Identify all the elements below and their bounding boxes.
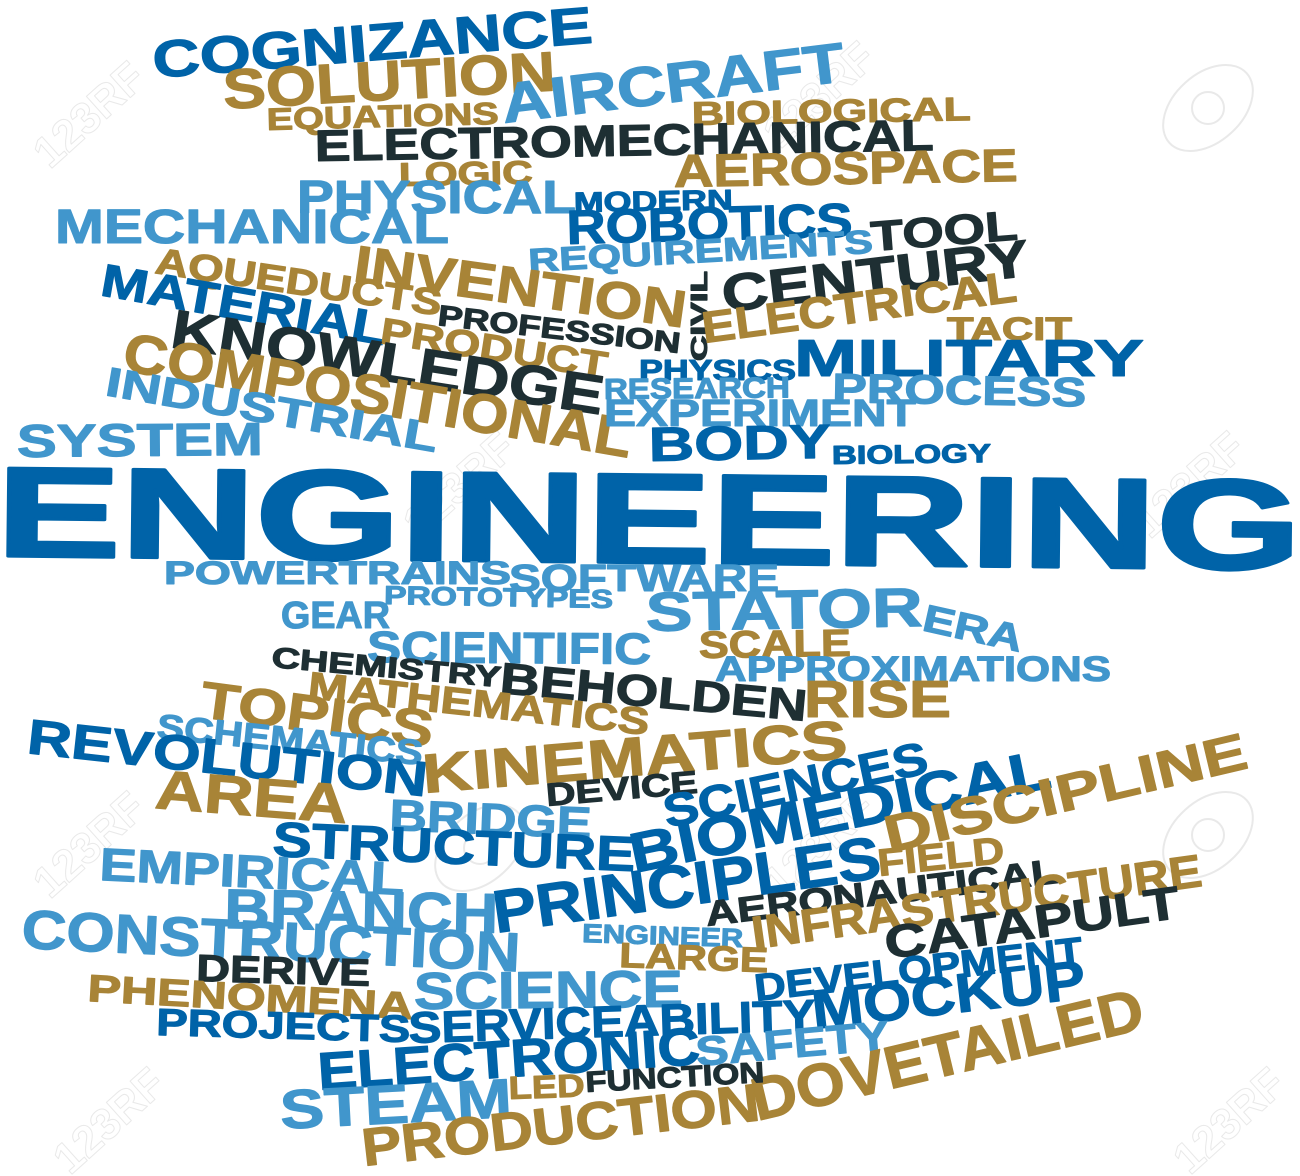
word: POWERTRAINS: POWERTRAINS (164, 555, 511, 591)
word: STATOR: STATOR (645, 576, 923, 643)
word: REQUIREMENTS: REQUIREMENTS (527, 223, 874, 279)
word: ELECTRONIC: ELECTRONIC (316, 1017, 702, 1102)
word: BIOMEDICAL: BIOMEDICAL (624, 737, 1056, 885)
word: TOPICS: TOPICS (197, 671, 437, 759)
word: PROFESSION: PROFESSION (436, 300, 682, 360)
word: SERVICEABILITY: SERVICEABILITY (408, 991, 816, 1053)
word: DERIVE: DERIVE (196, 948, 371, 995)
word: PRODUCTION: PRODUCTION (359, 1073, 763, 1176)
word: BRIDGE: BRIDGE (389, 791, 592, 848)
word: ELECTRICAL: ELECTRICAL (699, 262, 1020, 353)
word: SYSTEM: SYSTEM (17, 413, 263, 467)
word: SOLUTION: SOLUTION (221, 39, 557, 121)
watermarks: 123RF (24, 783, 155, 907)
word: CATAPULT: CATAPULT (881, 876, 1183, 969)
word: LARGE: LARGE (619, 936, 769, 980)
watermarks: 123RF (754, 783, 885, 907)
word: MOCKUP: MOCKUP (808, 948, 1089, 1041)
word: CIVIL: CIVIL (686, 271, 712, 361)
word: EXPERIMENT: EXPERIMENT (604, 393, 916, 435)
word: LOGIC: LOGIC (398, 154, 533, 193)
word: PHYSICAL: PHYSICAL (297, 171, 576, 223)
word: RESEARCH: RESEARCH (604, 372, 790, 406)
word: SCIENCE: SCIENCE (414, 961, 683, 1021)
word: INFRASTRUCTURE: INFRASTRUCTURE (748, 844, 1205, 959)
word: MATERIAL: MATERIAL (97, 254, 391, 355)
word: CHEMISTRY: CHEMISTRY (270, 642, 502, 694)
word: RISE: RISE (804, 671, 951, 729)
word: PROCESS: PROCESS (832, 365, 1087, 415)
word: FUNCTION: FUNCTION (585, 1057, 765, 1099)
word: MECHANICAL: MECHANICAL (55, 201, 449, 254)
word: EMPIRICAL: EMPIRICAL (99, 838, 406, 905)
word: AEROSPACE: AEROSPACE (673, 139, 1018, 197)
word: SCALE: SCALE (699, 623, 851, 667)
word: MODERN: MODERN (574, 184, 733, 218)
word: EQUATIONS: EQUATIONS (266, 96, 499, 137)
word: SCIENCES: SCIENCES (658, 731, 932, 838)
word: COMPOSITIONAL: COMPOSITIONAL (119, 321, 637, 469)
word: INDUSTRIAL: INDUSTRIAL (102, 359, 441, 461)
word: CONSTRUCTION: CONSTRUCTION (20, 898, 522, 983)
word: TOOL: TOOL (869, 202, 1019, 260)
word: PROTOTYPES: PROTOTYPES (384, 580, 613, 614)
word: AIRCRAFT: AIRCRAFT (498, 30, 848, 135)
word: SCIENTIFIC: SCIENTIFIC (367, 623, 651, 674)
word: BIOLOGY: BIOLOGY (832, 438, 991, 470)
word: PHENOMENA: PHENOMENA (86, 968, 414, 1028)
word: BRANCH: BRANCH (224, 877, 499, 945)
watermarks: 123RF (1124, 423, 1255, 547)
word: STRUCTURE: STRUCTURE (272, 813, 636, 882)
word: PHYSICS: PHYSICS (639, 355, 796, 387)
word: MATHEMATICS: MATHEMATICS (306, 665, 652, 744)
word: DOVETAILED: DOVETAILED (744, 976, 1150, 1134)
word: SCHEMATICS: SCHEMATICS (155, 707, 425, 773)
word: PRODUCT: PRODUCT (378, 310, 611, 386)
word: GEAR: GEAR (281, 595, 390, 637)
word: TACIT: TACIT (947, 311, 1073, 347)
watermarks: 123RF (754, 33, 885, 157)
word: AERONAUTICAL: AERONAUTICAL (703, 852, 1060, 934)
word: AREA: AREA (153, 758, 350, 835)
word: AQUEDUCTS: AQUEDUCTS (153, 240, 445, 324)
word: DISCIPLINE: DISCIPLINE (878, 723, 1253, 865)
word: ERA: ERA (919, 598, 1027, 661)
word: ROBOTICS: ROBOTICS (566, 195, 853, 255)
word: ENGINEER: ENGINEER (582, 918, 744, 953)
watermarks: 123RF (394, 423, 525, 547)
word: INVENTION: INVENTION (350, 235, 690, 340)
word: APPROXIMATIONS: APPROXIMATIONS (715, 650, 1111, 689)
watermarks: 123RF (24, 53, 155, 177)
word: BODY: BODY (648, 416, 831, 472)
word: LED: LED (508, 1067, 585, 1106)
word: SAFETY: SAFETY (694, 1012, 891, 1075)
word: PRINCIPLES: PRINCIPLES (488, 824, 885, 946)
word: ELECTROMECHANICAL: ELECTROMECHANICAL (314, 111, 934, 171)
word: SOFTWARE: SOFTWARE (509, 558, 779, 600)
word: REVOLUTION: REVOLUTION (25, 710, 430, 807)
word: COGNIZANCE: COGNIZANCE (150, 0, 595, 90)
word: BEHOLDEN: BEHOLDEN (498, 654, 809, 731)
word: STEAM: STEAM (278, 1067, 513, 1141)
word: KINEMATICS: KINEMATICS (420, 708, 850, 805)
word: DEVELOPMENT: DEVELOPMENT (752, 930, 1085, 1010)
word: CENTURY: CENTURY (719, 230, 1032, 324)
word: FIELD: FIELD (876, 830, 1006, 885)
title word: ENGINEERING: ENGINEERING (0, 441, 1300, 598)
word: KNOWLEDGE: KNOWLEDGE (167, 298, 608, 426)
word: MILITARY: MILITARY (794, 330, 1144, 388)
word: DEVICE: DEVICE (544, 764, 699, 813)
word: BIOLOGICAL: BIOLOGICAL (691, 90, 971, 132)
word: PROJECTS: PROJECTS (156, 1002, 411, 1051)
